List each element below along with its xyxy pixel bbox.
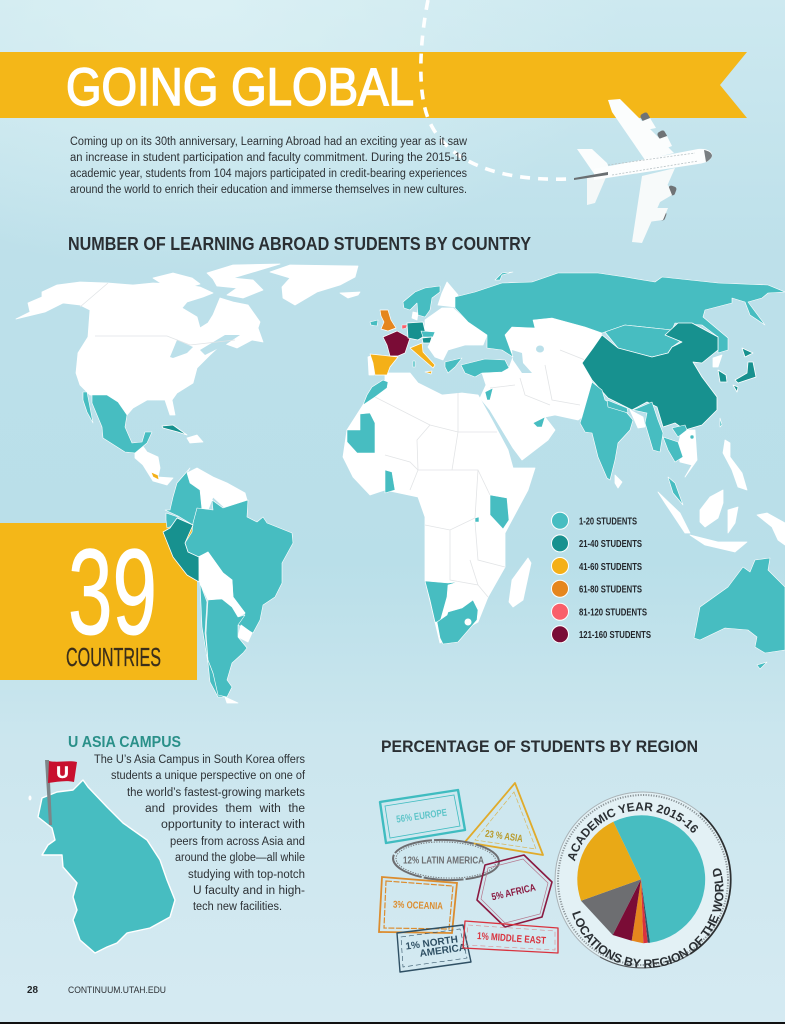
- stamp: asia: [465, 783, 543, 855]
- map heading: NUMBER OF LEARNING ABROAD STUDENTS BY COUNTRY: [68, 234, 531, 254]
- icon: u flag: U: [56, 763, 69, 782]
- icon: u flag: [45, 760, 77, 825]
- footer url: CONTINUUM.UTAH.EDU: [68, 985, 166, 995]
- callout panel: 39 countries: COUNTRIES: [66, 642, 161, 672]
- postmark ring: [555, 792, 731, 968]
- u asia campus text: [94, 754, 306, 913]
- stamp: middle east: 1% MIDDLE EAST: [477, 931, 546, 947]
- stamp: europe: 56% EUROPE: [396, 808, 448, 826]
- u asia campus text: opportunity to interact with: [161, 819, 305, 831]
- legend item: 61-80 students: 61-80 STUDENTS: [579, 584, 642, 596]
- u asia campus text: U faculty and in high-: [193, 885, 305, 897]
- intro paragraph: around the world to enrich their education and immerse themselves in new cultures.: [70, 184, 467, 196]
- stamp: north america: 1% NORTH: [405, 934, 459, 953]
- stamp: oceania: 3% OCEANIA: [393, 900, 443, 912]
- flight path dashes: [421, 0, 568, 179]
- south america: [163, 468, 293, 703]
- legend: [552, 512, 651, 643]
- postmark pie chart: [554, 792, 732, 968]
- u asia campus text: around the globe—all while: [175, 852, 305, 864]
- u asia campus text: studying with top-notch: [188, 869, 305, 881]
- stamp: africa: 5% AFRICA: [491, 882, 537, 903]
- u asia campus text: peers from across Asia and: [170, 836, 305, 848]
- legend item: 81-120 students: 81-120 STUDENTS: [579, 608, 647, 618]
- stamp: oceania: [379, 877, 457, 933]
- mexico and central america: [83, 392, 203, 485]
- legend item: 1-20 students: 1-20 STUDENTS: [579, 516, 637, 528]
- intro paragraph: academic year, students from 104 majors participated in credit-bearing experiences: [70, 168, 467, 180]
- legend item: 21-40 students: 21-40 STUDENTS: [579, 539, 642, 550]
- u asia campus text: The U’s Asia Campus in South Korea offers: [94, 754, 305, 766]
- stamp: north america: [397, 925, 471, 972]
- curved label: academic year: ACADEMIC YEAR 2015-16: [568, 802, 698, 862]
- u asia campus heading: U ASIA CAMPUS: [68, 734, 181, 751]
- legend item: 41-60 students: 41-60 STUDENTS: [579, 562, 642, 573]
- north america: [16, 264, 360, 415]
- stamp: latin america: 12% LATIN AMERICA: [403, 856, 484, 866]
- curved label: locations by region: LOCATIONS BY REGION OF THE WORLD: [572, 868, 724, 968]
- region heading: PERCENTAGE OF STUDENTS BY REGION: [381, 737, 698, 756]
- icon: airplane: [574, 99, 712, 243]
- title banner: [0, 52, 747, 118]
- europe: [368, 282, 487, 375]
- stamp: north america: AMERICA: [419, 942, 467, 960]
- u asia campus text: students a unique perspective on one of: [111, 770, 306, 782]
- callout panel: 39 countries: 39: [68, 524, 157, 660]
- korea map: [28, 780, 175, 953]
- stamp: middle east: [463, 921, 558, 953]
- world map: [16, 264, 785, 703]
- australia: [694, 558, 785, 669]
- asia: [455, 272, 785, 552]
- pie slices: [577, 815, 705, 943]
- intro paragraph: Coming up on its 30th anniversary, Learning Abroad had an exciting year as it saw: [70, 136, 468, 148]
- u asia campus text: and provides them with the: [145, 803, 305, 815]
- legend item: 121-160 students: 121-160 STUDENTS: [579, 630, 651, 641]
- intro paragraph: an increase in student participation and faculty commitment. During the 2015-16: [70, 152, 467, 164]
- stamp: africa: [477, 855, 552, 927]
- callout panel: 39 countries: [0, 523, 197, 680]
- page number: 28: [27, 984, 38, 996]
- title: GOING GLOBAL: [66, 58, 414, 117]
- intro paragraph: [70, 136, 468, 196]
- africa: [343, 373, 535, 644]
- u asia campus text: tech new facilities.: [193, 901, 282, 913]
- stamp: asia: 23 % ASIA: [484, 829, 523, 845]
- stamp: europe: [380, 790, 465, 843]
- u asia campus text: the world’s fastest-growing markets: [127, 787, 305, 799]
- stamp: latin america: [392, 838, 500, 882]
